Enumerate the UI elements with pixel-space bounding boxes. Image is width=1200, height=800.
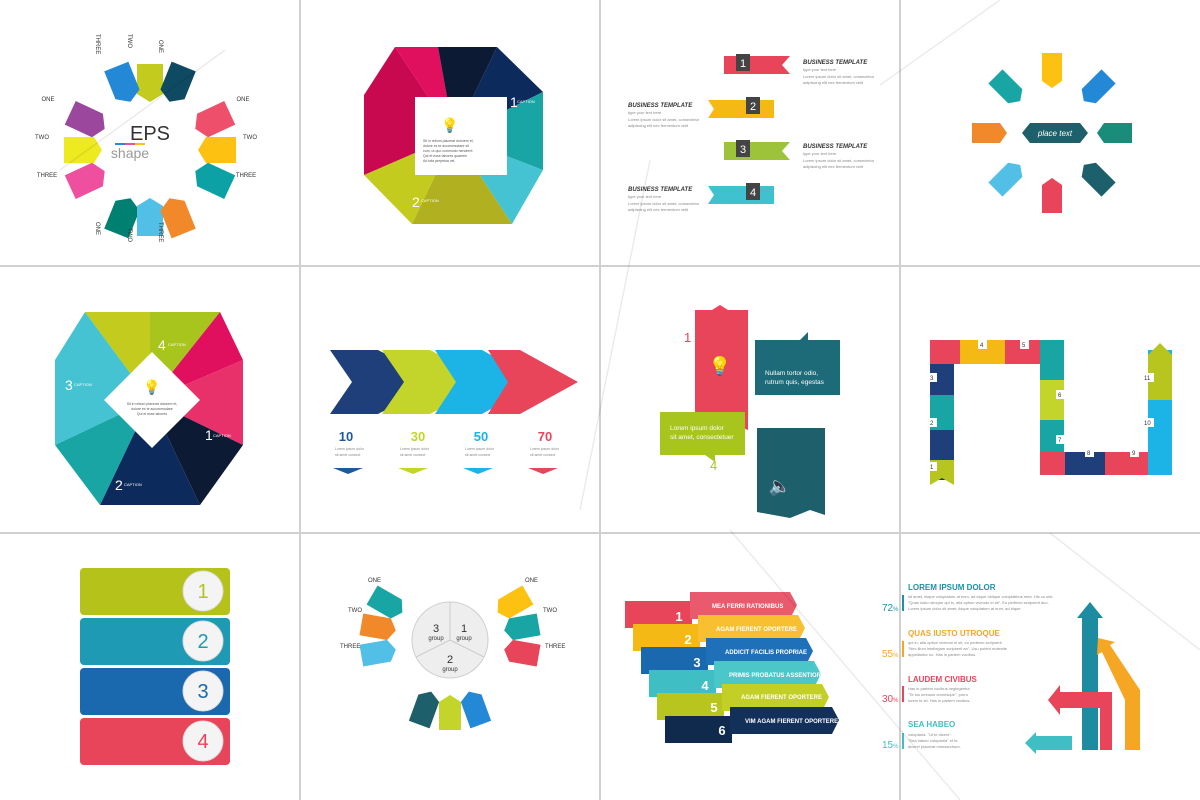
panel: percentage arrows: 15% xyxy=(882,740,899,751)
panel: speech boxes: 💡 xyxy=(709,355,731,376)
panel: EPS radial arrows: ONE xyxy=(236,97,250,103)
panel: EPS radial arrows xyxy=(35,34,257,242)
panel: percentage arrows: LAUDEM CIVIBUS xyxy=(908,675,978,684)
panel: overlapping arrows 10-70: Lorem ipsum dolor xyxy=(530,447,560,451)
panel: percentage arrows: Lorem ipsum dolor sit amet, iisque voluptatum at eum, ad idque xyxy=(908,606,1021,611)
panel: business template tabs: BUSINESS TEMPLATE xyxy=(803,144,868,150)
panel: 3D numbered ribbons: 4 xyxy=(701,678,709,693)
panel: percentage arrows: LOREM IPSUM DOLOR xyxy=(908,583,996,592)
panel: group circle: ONE xyxy=(368,578,381,584)
panel: numbered bars: 3 xyxy=(197,681,209,703)
panel: octagon with captions: 3 xyxy=(326,165,334,181)
panel: EPS radial arrows: EPS xyxy=(130,123,170,145)
panel: business template tabs: Lorem ipsum dolor sit amet, consectetur xyxy=(628,201,700,206)
panel: 3D numbered ribbons: 6 xyxy=(718,723,726,738)
panel: business template tabs: adipiscing elit nec fermentum velit xyxy=(628,123,689,128)
panel: group circle: 1 xyxy=(461,623,467,635)
panel: group circle: TWO xyxy=(543,608,557,614)
panel: square loop of arrows: 3 xyxy=(930,376,934,382)
panel: business template tabs: Lorem ipsum dolor sit amet, consectetur xyxy=(803,158,875,163)
panel: octagon diamond: Qui et esse labores xyxy=(137,412,167,416)
panel: business template tabs: BUSINESS TEMPLATE xyxy=(628,187,693,193)
panel: percentage arrows: voluptaria. "Ut te dicere". xyxy=(908,732,952,737)
panel: speech boxes: 🔈 xyxy=(769,476,791,497)
panel: octagon diamond: 💡 xyxy=(143,379,161,396)
panel: percentage arrows: "Te ius omnium omnesque", porro xyxy=(908,692,969,697)
panel: octagon diamond: CAPTION xyxy=(213,433,231,438)
panel: business template tabs: type your text here xyxy=(628,194,662,199)
panel: place text radial: place text xyxy=(1037,129,1073,138)
panel: octagon diamond xyxy=(55,312,243,505)
panel: octagon with captions: CAPTION xyxy=(517,99,535,104)
panel: group circle: THREE xyxy=(545,644,565,650)
panel: square loop of arrows: 9 xyxy=(1132,451,1136,457)
panel: percentage arrows: 30% xyxy=(882,694,899,705)
panel: percentage arrows: sit amet, iisque voluptatum at eum, ad idque oblique voluptatibus mea. His cu sint. xyxy=(908,594,1053,599)
panel: octagon with captions: 💡 xyxy=(441,117,459,134)
panel: EPS radial arrows: TWO xyxy=(243,135,257,141)
panel: square loop of arrows: 5 xyxy=(1022,343,1026,349)
panel: group circle: group xyxy=(456,636,472,642)
panel: overlapping arrows 10-70 xyxy=(330,350,578,474)
panel: percentage arrows: appellantur no. Has in partem vocibus. xyxy=(908,652,976,657)
panel: octagon with captions xyxy=(326,47,543,224)
panel: octagon diamond: CAPTION xyxy=(168,342,186,347)
panel: octagon diamond: CAPTION xyxy=(124,482,142,487)
panel: business template tabs: adipiscing elit nec fermentum velit xyxy=(628,207,689,212)
panel: overlapping arrows 10-70: Lorem ipsum dolor xyxy=(335,447,365,451)
panel: speech boxes: 3 xyxy=(810,446,817,461)
panel: speech boxes: Lorem ipsum dolor xyxy=(670,425,725,432)
panel: octagon diamond: 4 xyxy=(158,337,166,353)
panel: octagon with captions: Ad tota perpetua vel. xyxy=(423,159,455,163)
panel: octagon with captions: CAPTION xyxy=(358,69,376,74)
panel: octagon with captions: Qui et esse labores quaeren xyxy=(423,154,467,158)
panel: place text radial xyxy=(972,53,1132,213)
panel: business template tabs: BUSINESS TEMPLATE xyxy=(803,60,868,66)
panel: group circle xyxy=(340,578,565,730)
panel: business template tabs xyxy=(628,54,875,212)
panel: EPS radial arrows: ONE xyxy=(157,40,163,53)
panel: business template tabs: type your text here xyxy=(803,151,837,156)
panel: square loop of arrows: 4 xyxy=(980,343,984,349)
panel: group circle: group xyxy=(428,636,444,642)
panel: overlapping arrows 10-70: sit amet consect xyxy=(400,453,425,457)
panel: octagon diamond: Sit in rebum placerat dolorem et, xyxy=(127,402,177,406)
panel: overlapping arrows 10-70: Lorem ipsum dolor xyxy=(465,447,495,451)
panel: 3D numbered ribbons: 5 xyxy=(710,700,718,715)
panel: business template tabs: Lorem ipsum dolor sit amet, consectetur xyxy=(803,74,875,79)
panel: 3D numbered ribbons: ADDICIT FACILIS PROPRIAE xyxy=(725,650,807,656)
panel: octagon diamond: CAPTION xyxy=(74,382,92,387)
panel: octagon with captions: 4 xyxy=(348,65,356,81)
panel: percentage arrows: Has in partem vocibus neglegentur. xyxy=(908,686,971,691)
panel: square loop of arrows: 11 xyxy=(1144,376,1151,382)
panel: 3D numbered ribbons: AGAM FIERENT OPORTERE xyxy=(716,627,797,633)
panel: group circle: 2 xyxy=(447,654,453,666)
panel: square loop of arrows: 6 xyxy=(1058,393,1062,399)
panel: percentage arrows xyxy=(882,583,1140,754)
panel: octagon diamond: 1 xyxy=(205,427,213,443)
panel: octagon diamond: dolore ex te accommodare xyxy=(131,407,173,411)
panel: EPS radial arrows: TWO xyxy=(126,34,132,48)
panel: business template tabs: adipiscing elit nec fermentum velit xyxy=(803,164,864,169)
panel: overlapping arrows 10-70: 70 xyxy=(538,429,552,444)
panel: EPS radial arrows: THREE xyxy=(94,34,100,54)
panel: speech boxes xyxy=(660,305,840,518)
panel: percentage arrows: qui in, alia option vivendo ei sit, eu perfecto scripserit. xyxy=(908,640,1003,645)
panel: square loop of arrows: 1 xyxy=(930,465,934,471)
panel: overlapping arrows 10-70: 30 xyxy=(411,429,425,444)
panel: business template tabs: adipiscing elit nec fermentum velit xyxy=(803,80,864,85)
panel: percentage arrows: "Nec illum intellegam scripserit an". Usu putent molestie xyxy=(908,646,1008,651)
panel: EPS radial arrows: shape xyxy=(111,145,149,161)
panel: numbered bars: 4 xyxy=(197,731,209,753)
panel: octagon with captions: 2 xyxy=(412,194,420,210)
panel: EPS radial arrows: THREE xyxy=(37,173,57,179)
panel: overlapping arrows 10-70: 10 xyxy=(339,429,353,444)
panel: octagon with captions: CAPTION xyxy=(421,198,439,203)
panel: overlapping arrows 10-70: sit amet consect xyxy=(530,453,555,457)
panel: numbered bars xyxy=(80,568,230,765)
panel: group circle: THREE xyxy=(340,644,360,650)
panel: speech boxes: rutrum quis, egestas xyxy=(765,379,825,386)
panel: 3D numbered ribbons: VIM AGAM FIERENT OPORTERE xyxy=(745,719,838,725)
panel: 3D numbered ribbons: MEA FERRI RATIONIBUS xyxy=(712,604,783,610)
panel: octagon with captions: cum, ut quo commodo hendrerit xyxy=(423,149,472,153)
panel: square loop of arrows: 10 xyxy=(1144,421,1151,427)
panel: business template tabs: 3 xyxy=(740,144,746,156)
panel: business template tabs: BUSINESS TEMPLATE xyxy=(628,103,693,109)
panel: numbered bars: 1 xyxy=(197,581,209,603)
panel: business template tabs: Lorem ipsum dolor sit amet, consectetur xyxy=(628,117,700,122)
panel: group circle: TWO xyxy=(348,608,362,614)
panel: speech boxes: 2 xyxy=(808,349,815,364)
panel: percentage arrows: "Quas iusto utroque qui in, alia option vivendo ei sit". Eu perfecto scripserit duo. xyxy=(908,600,1049,605)
panel: percentage arrows: 72% xyxy=(882,603,899,614)
panel: square loop of arrows: 2 xyxy=(930,421,934,427)
panel: business template tabs: type your text here xyxy=(628,110,662,115)
panel: overlapping arrows 10-70: sit amet consect xyxy=(335,453,360,457)
panel: EPS radial arrows: TWO xyxy=(35,135,49,141)
panel: speech boxes: 4 xyxy=(710,458,717,473)
panel: 3D numbered ribbons: 2 xyxy=(684,632,692,647)
panel: octagon with captions: 1 xyxy=(510,94,518,110)
panel: percentage arrows: 55% xyxy=(882,649,899,660)
panel: square loop of arrows: 7 xyxy=(1058,438,1062,444)
panel: square loop of arrows xyxy=(928,340,1172,485)
panel: business template tabs: type your text here xyxy=(803,67,837,72)
panel: business template tabs: 4 xyxy=(750,187,756,199)
panel: EPS radial arrows: ONE xyxy=(94,222,100,235)
panel: octagon with captions: dolore ex te accommodare sit xyxy=(423,144,469,148)
panel: 3D numbered ribbons: 1 xyxy=(675,609,683,624)
panel: percentage arrows: dicere! placerat mnesarchum. xyxy=(908,744,961,749)
panel: speech boxes: 1 xyxy=(684,330,691,345)
panel: octagon diamond: 3 xyxy=(65,377,73,393)
panel: percentage arrows: QUAS IUSTO UTROQUE xyxy=(908,629,1001,638)
panel: 3D numbered ribbons: 3 xyxy=(693,655,701,670)
panel: square loop of arrows: 8 xyxy=(1087,451,1091,457)
panel: octagon with captions: Sit in rebum placerat dolorem et, xyxy=(423,139,474,143)
panel: 3D numbered ribbons: PRIMIS PROBATUS ASSENTIOR xyxy=(729,673,822,679)
panel: business template tabs: 2 xyxy=(750,101,756,113)
panel: EPS radial arrows: THREE xyxy=(236,173,256,179)
panel: percentage arrows: "Sea habeo voluptaria" et te xyxy=(908,738,958,743)
panel: octagon diamond: 2 xyxy=(115,477,123,493)
panel: percentage arrows: SEA HABEO xyxy=(908,720,955,729)
panel: EPS radial arrows: TWO xyxy=(126,228,132,242)
panel: overlapping arrows 10-70: sit amet consect xyxy=(465,453,490,457)
panel: numbered bars: 2 xyxy=(197,631,209,653)
panel: octagon with captions: CAPTION xyxy=(335,168,353,173)
panel: percentage arrows: lorem te sit. Has in partem vocibus. xyxy=(908,698,970,703)
panel: business template tabs: 1 xyxy=(740,58,746,70)
panel: 3D numbered ribbons xyxy=(625,592,839,743)
panel: speech boxes: sit amet, consectetuer xyxy=(670,434,734,441)
panel: group circle: 3 xyxy=(433,623,439,635)
panel: group circle: ONE xyxy=(525,578,538,584)
panel: 3D numbered ribbons: AGAM FIERENT OPORTERE xyxy=(741,695,822,701)
panel: EPS radial arrows: ONE xyxy=(41,97,55,103)
panel: group circle: group xyxy=(442,667,458,673)
panel: EPS radial arrows: THREE xyxy=(157,222,163,242)
panel: speech boxes: Nullam tortor odio, xyxy=(765,370,818,377)
panel: overlapping arrows 10-70: 50 xyxy=(474,429,488,444)
panel: overlapping arrows 10-70: Lorem ipsum dolor xyxy=(400,447,430,451)
